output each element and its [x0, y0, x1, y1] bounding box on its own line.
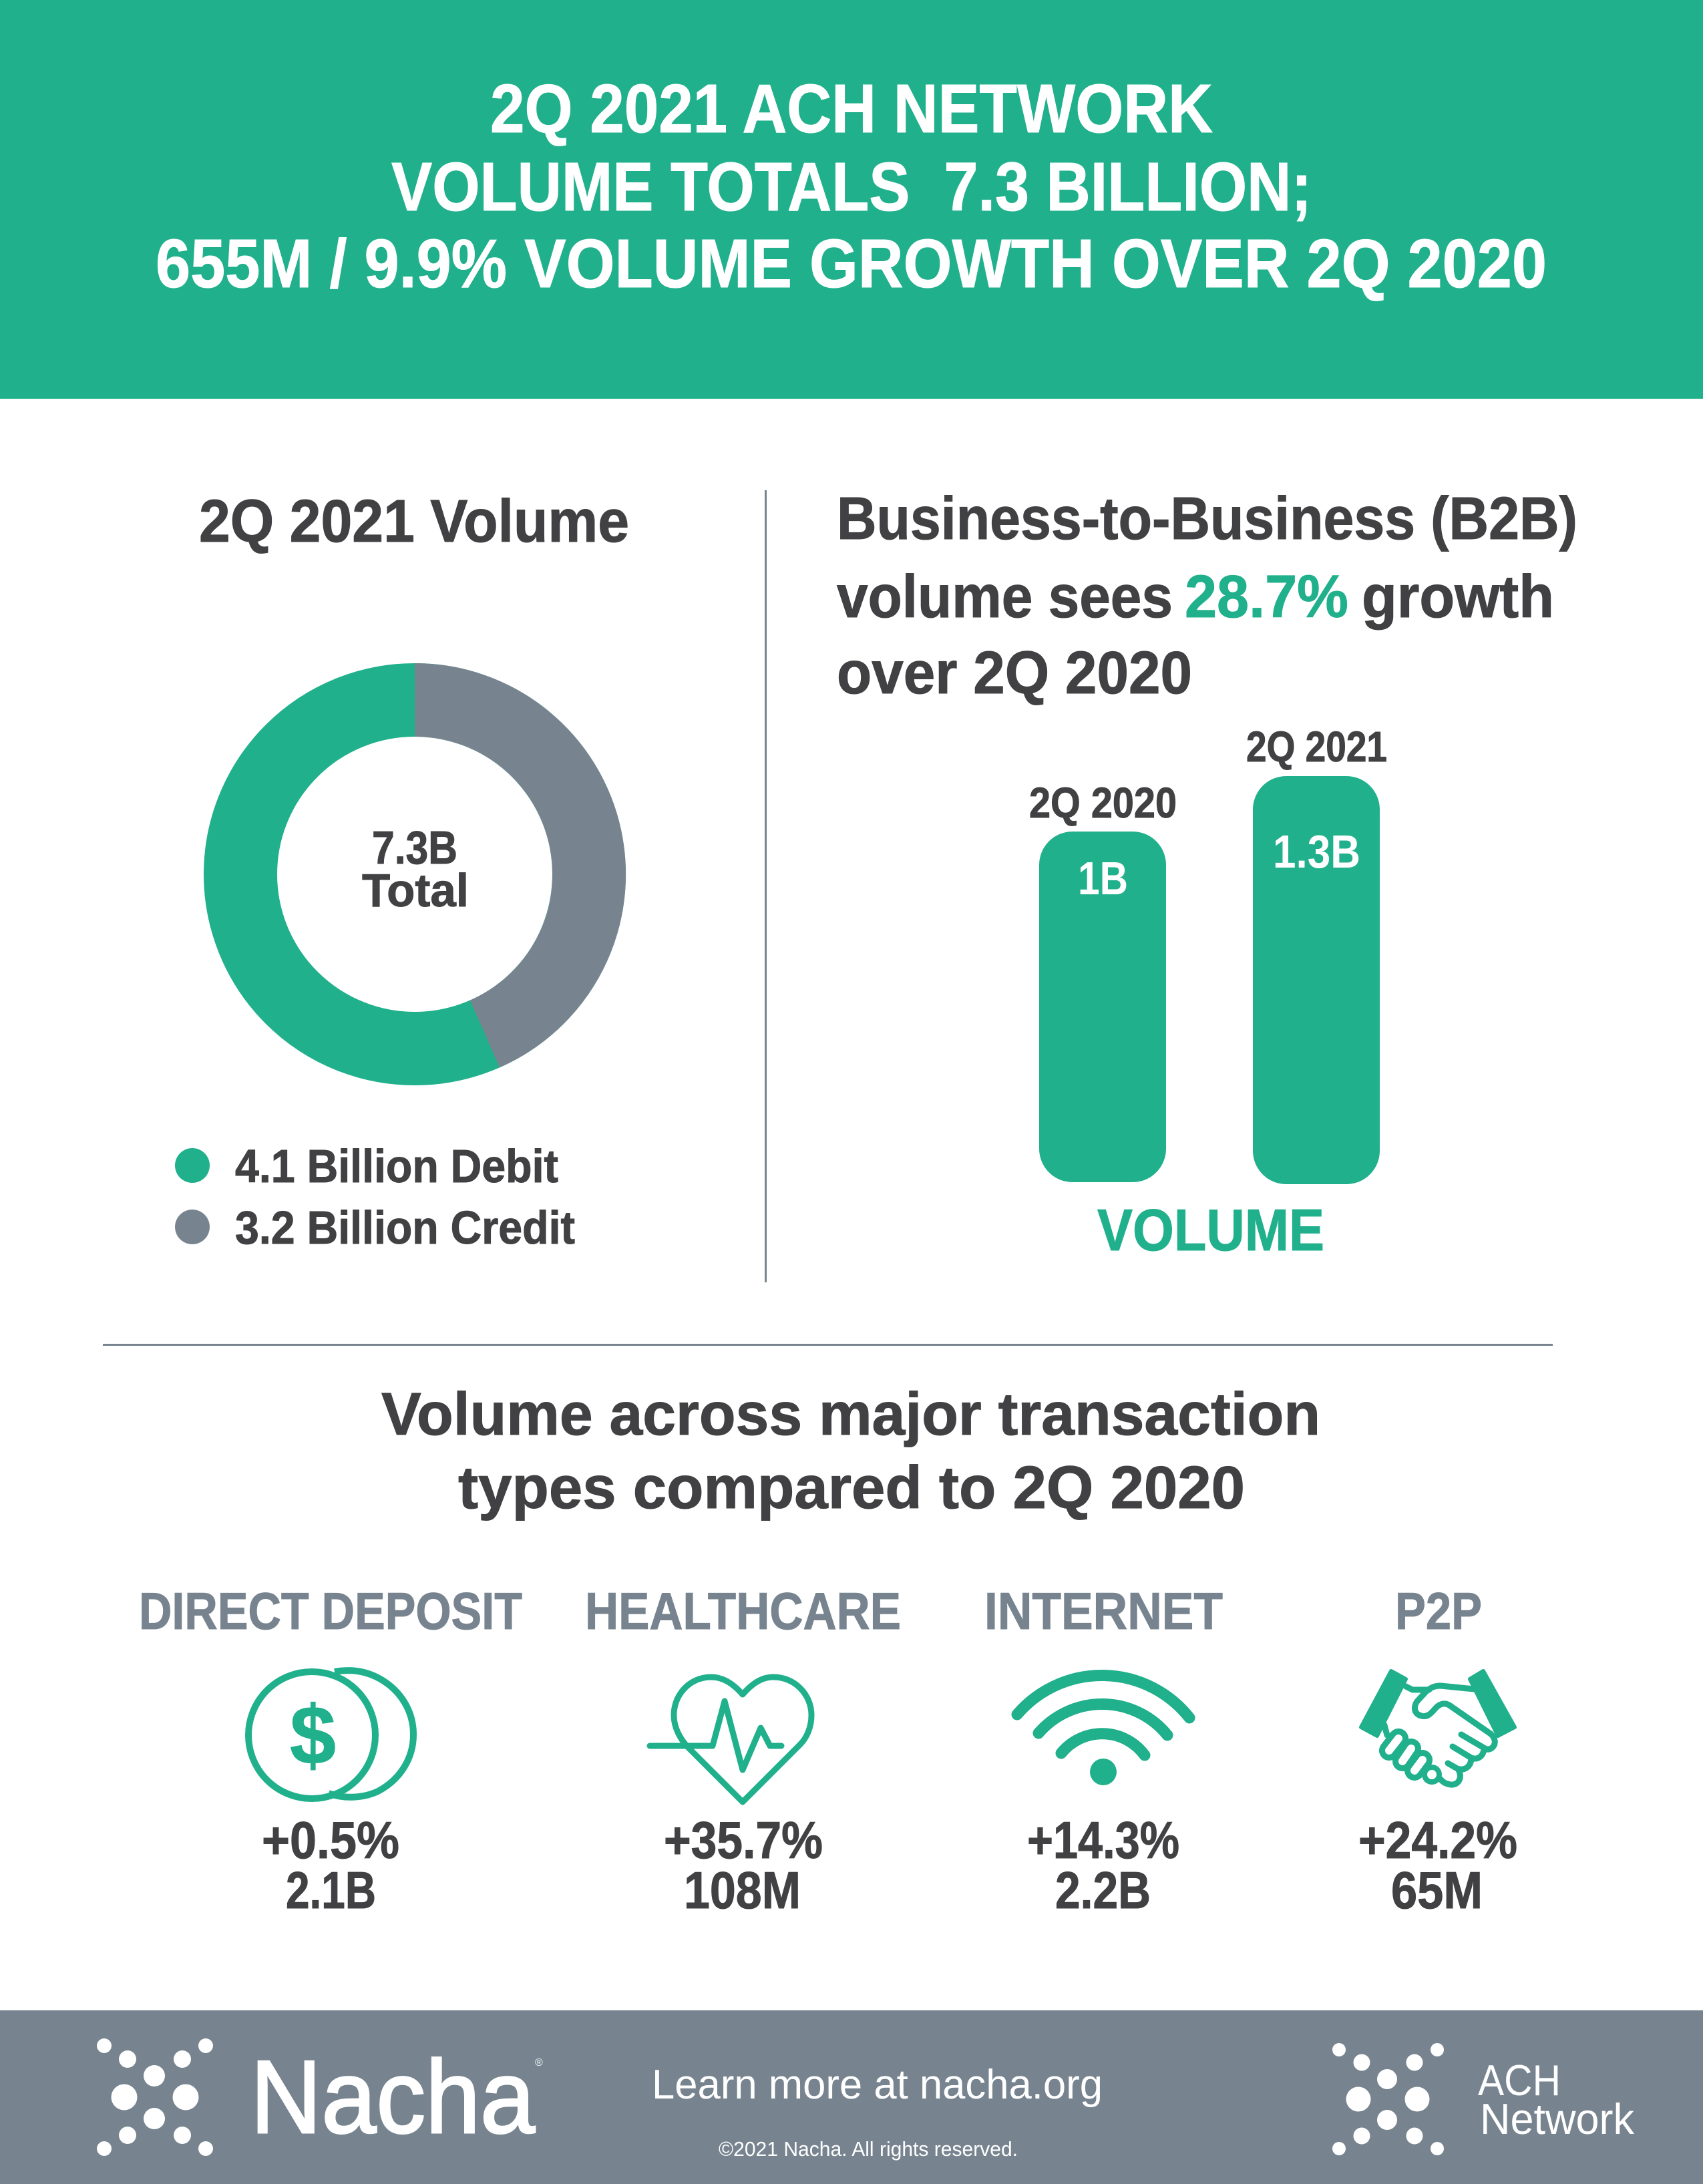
- value: 108M: [684, 1861, 801, 1920]
- value: +24.2%: [1358, 1811, 1517, 1869]
- value: +0.5%: [262, 1811, 399, 1869]
- footer band: [0, 2010, 1703, 2184]
- bar: 2Q 2021: 2Q 2021: [1246, 723, 1387, 771]
- call to action: Learn more at nacha.org: [652, 2062, 1103, 2108]
- donut centre label: 7.3B: [372, 822, 457, 874]
- bar: 2Q 2020: 2Q 2020: [1029, 779, 1177, 827]
- title: 655M / 9.9% VOLUME GROWTH OVER 2Q 2020: [156, 225, 1547, 302]
- bar: 2Q 2021: [1246, 723, 1387, 1184]
- heading: B2B growth: 28.7%: [1185, 564, 1348, 630]
- icon: coins: [248, 1670, 413, 1799]
- column: internet: INTERNET: [984, 1582, 1223, 1640]
- legend: [175, 1140, 575, 1254]
- bar: 2Q 2020: 1B: [1078, 852, 1128, 904]
- heading: B2B growth: over 2Q 2020: [837, 640, 1192, 707]
- heading: transaction types: [381, 1381, 1320, 1521]
- title: 2Q 2021 ACH NETWORK: [490, 70, 1213, 147]
- legend: 4.1 Billion Debit: [235, 1140, 558, 1192]
- value: [1027, 1811, 1179, 1920]
- value: [1358, 1811, 1517, 1920]
- heading: 2Q 2021 Volume: 2Q 2021 Volume: [199, 488, 629, 555]
- icon: heart with pulse: [650, 1677, 811, 1802]
- heading: B2B growth: Business-to-Business (B2B): [837, 486, 1577, 552]
- heading: transaction types: Volume across major transaction: [381, 1381, 1320, 1448]
- value: +35.7%: [664, 1811, 823, 1869]
- value: 2.2B: [1055, 1861, 1151, 1920]
- value: [664, 1811, 823, 1920]
- icon: handshake: [1361, 1671, 1515, 1785]
- heading: B2B growth: growth: [1362, 564, 1554, 630]
- column: internet: [984, 1582, 1223, 1920]
- icon: coins: $: [290, 1690, 336, 1782]
- ACH Network logo: [1332, 2043, 1634, 2155]
- heading: transaction types: types compared to 2Q 2020: [458, 1455, 1245, 1521]
- wordmark: Network: [1480, 2095, 1634, 2143]
- panel: B2B volume: [837, 486, 1577, 1263]
- panel: 2Q 2021 volume: [175, 488, 629, 1254]
- heading: B2B growth: volume sees: [837, 564, 1173, 630]
- column: healthcare: HEALTHCARE: [585, 1582, 901, 1640]
- value: +14.3%: [1027, 1811, 1179, 1869]
- panel: transaction types: [139, 1381, 1517, 1920]
- title: [156, 70, 1547, 302]
- bar: 2Q 2021: 1.3B: [1273, 826, 1360, 878]
- wordmark: Nacha: [250, 2039, 536, 2155]
- column: direct deposit: DIRECT DEPOSIT: [139, 1582, 522, 1640]
- column: direct deposit: [139, 1582, 522, 1920]
- donut centre label: [362, 822, 469, 916]
- axis label: VOLUME: [1097, 1197, 1324, 1263]
- donut chart: [240, 700, 589, 1049]
- column: P2P: P2P: [1395, 1582, 1482, 1640]
- Nacha logo: [97, 2038, 543, 2156]
- value: 65M: [1391, 1861, 1483, 1920]
- title: VOLUME TOTALS 7.3 BILLION;: [391, 148, 1312, 225]
- heading: B2B growth: [837, 486, 1577, 707]
- icon: ACH dots: [1332, 2043, 1444, 2155]
- wordmark: [1478, 2056, 1634, 2143]
- copyright: ©2021 Nacha. All rights reserved.: [719, 2137, 1018, 2161]
- Nacha logo: ®: [535, 2057, 543, 2068]
- header banner: [0, 0, 1703, 399]
- column: healthcare: [585, 1582, 901, 1920]
- donut centre label: Total: [362, 864, 469, 916]
- column: P2P: [1358, 1582, 1517, 1920]
- icon: wifi: [1017, 1676, 1189, 1785]
- value: 2.1B: [286, 1861, 376, 1920]
- value: [262, 1811, 399, 1920]
- bar: 2Q 2020: [1029, 779, 1177, 1182]
- icon: Nacha dots: [97, 2038, 213, 2156]
- wordmark: ACH: [1478, 2056, 1561, 2105]
- legend: 3.2 Billion Credit: [235, 1202, 575, 1254]
- bar chart: [1029, 723, 1387, 1263]
